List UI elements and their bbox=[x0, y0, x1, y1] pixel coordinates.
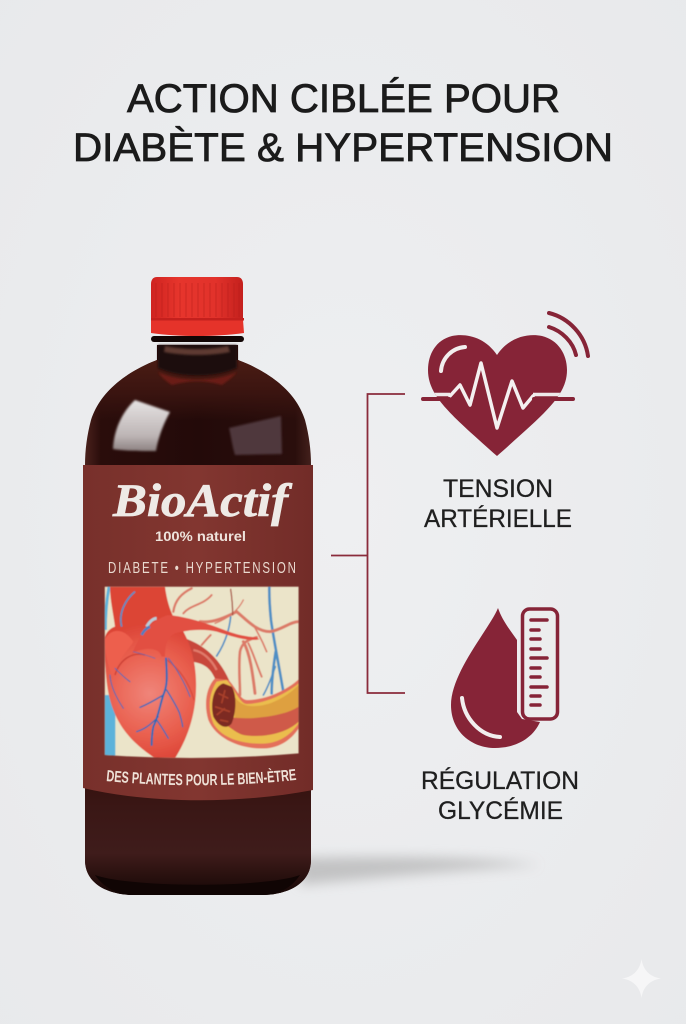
label: tension artérielle: TENSION bbox=[443, 475, 553, 503]
label: tension artérielle: ARTÉRIELLE bbox=[424, 504, 572, 533]
bottle cap bbox=[151, 277, 244, 336]
subtitle: 100% naturel bbox=[155, 528, 246, 544]
product bottle bbox=[83, 277, 313, 895]
glass highlights bbox=[113, 400, 170, 451]
label indication: DIABETE • HYPERTENSION bbox=[108, 558, 296, 576]
title bbox=[73, 76, 613, 170]
label: régulation glycémie: RÉGULATION bbox=[421, 766, 579, 795]
title: DIABÈTE & HYPERTENSION bbox=[73, 125, 613, 170]
neck ring bbox=[151, 336, 244, 342]
label: régulation glycémie: GLYCÉMIE bbox=[438, 796, 563, 825]
bottle shadow bbox=[300, 857, 540, 885]
title: ACTION CIBLÉE POUR bbox=[127, 76, 560, 121]
arteries bbox=[173, 588, 299, 695]
icon: heart with pulse bbox=[423, 313, 588, 456]
heart vessels bbox=[110, 652, 190, 745]
label tagline bbox=[106, 780, 296, 785]
connector bracket bbox=[331, 394, 405, 693]
label: tension artérielle bbox=[424, 475, 572, 533]
bottle label: DES PLANTES POUR LE BIEN-ÈTRE bbox=[106, 768, 296, 786]
pancreatic duct bbox=[185, 638, 229, 681]
veins bbox=[217, 587, 283, 695]
icon: sparkle bbox=[622, 959, 661, 998]
brand name: BioActif bbox=[112, 475, 293, 527]
label illustration bbox=[104, 586, 300, 759]
label: régulation glycémie bbox=[421, 766, 579, 825]
pancreas bbox=[206, 678, 299, 749]
icon: blood drop with gauge bbox=[451, 608, 558, 748]
bottle glass bbox=[85, 345, 311, 895]
bottle base shadow bbox=[95, 875, 300, 895]
bottle label bbox=[83, 465, 313, 800]
anatomical heart bbox=[105, 587, 196, 758]
